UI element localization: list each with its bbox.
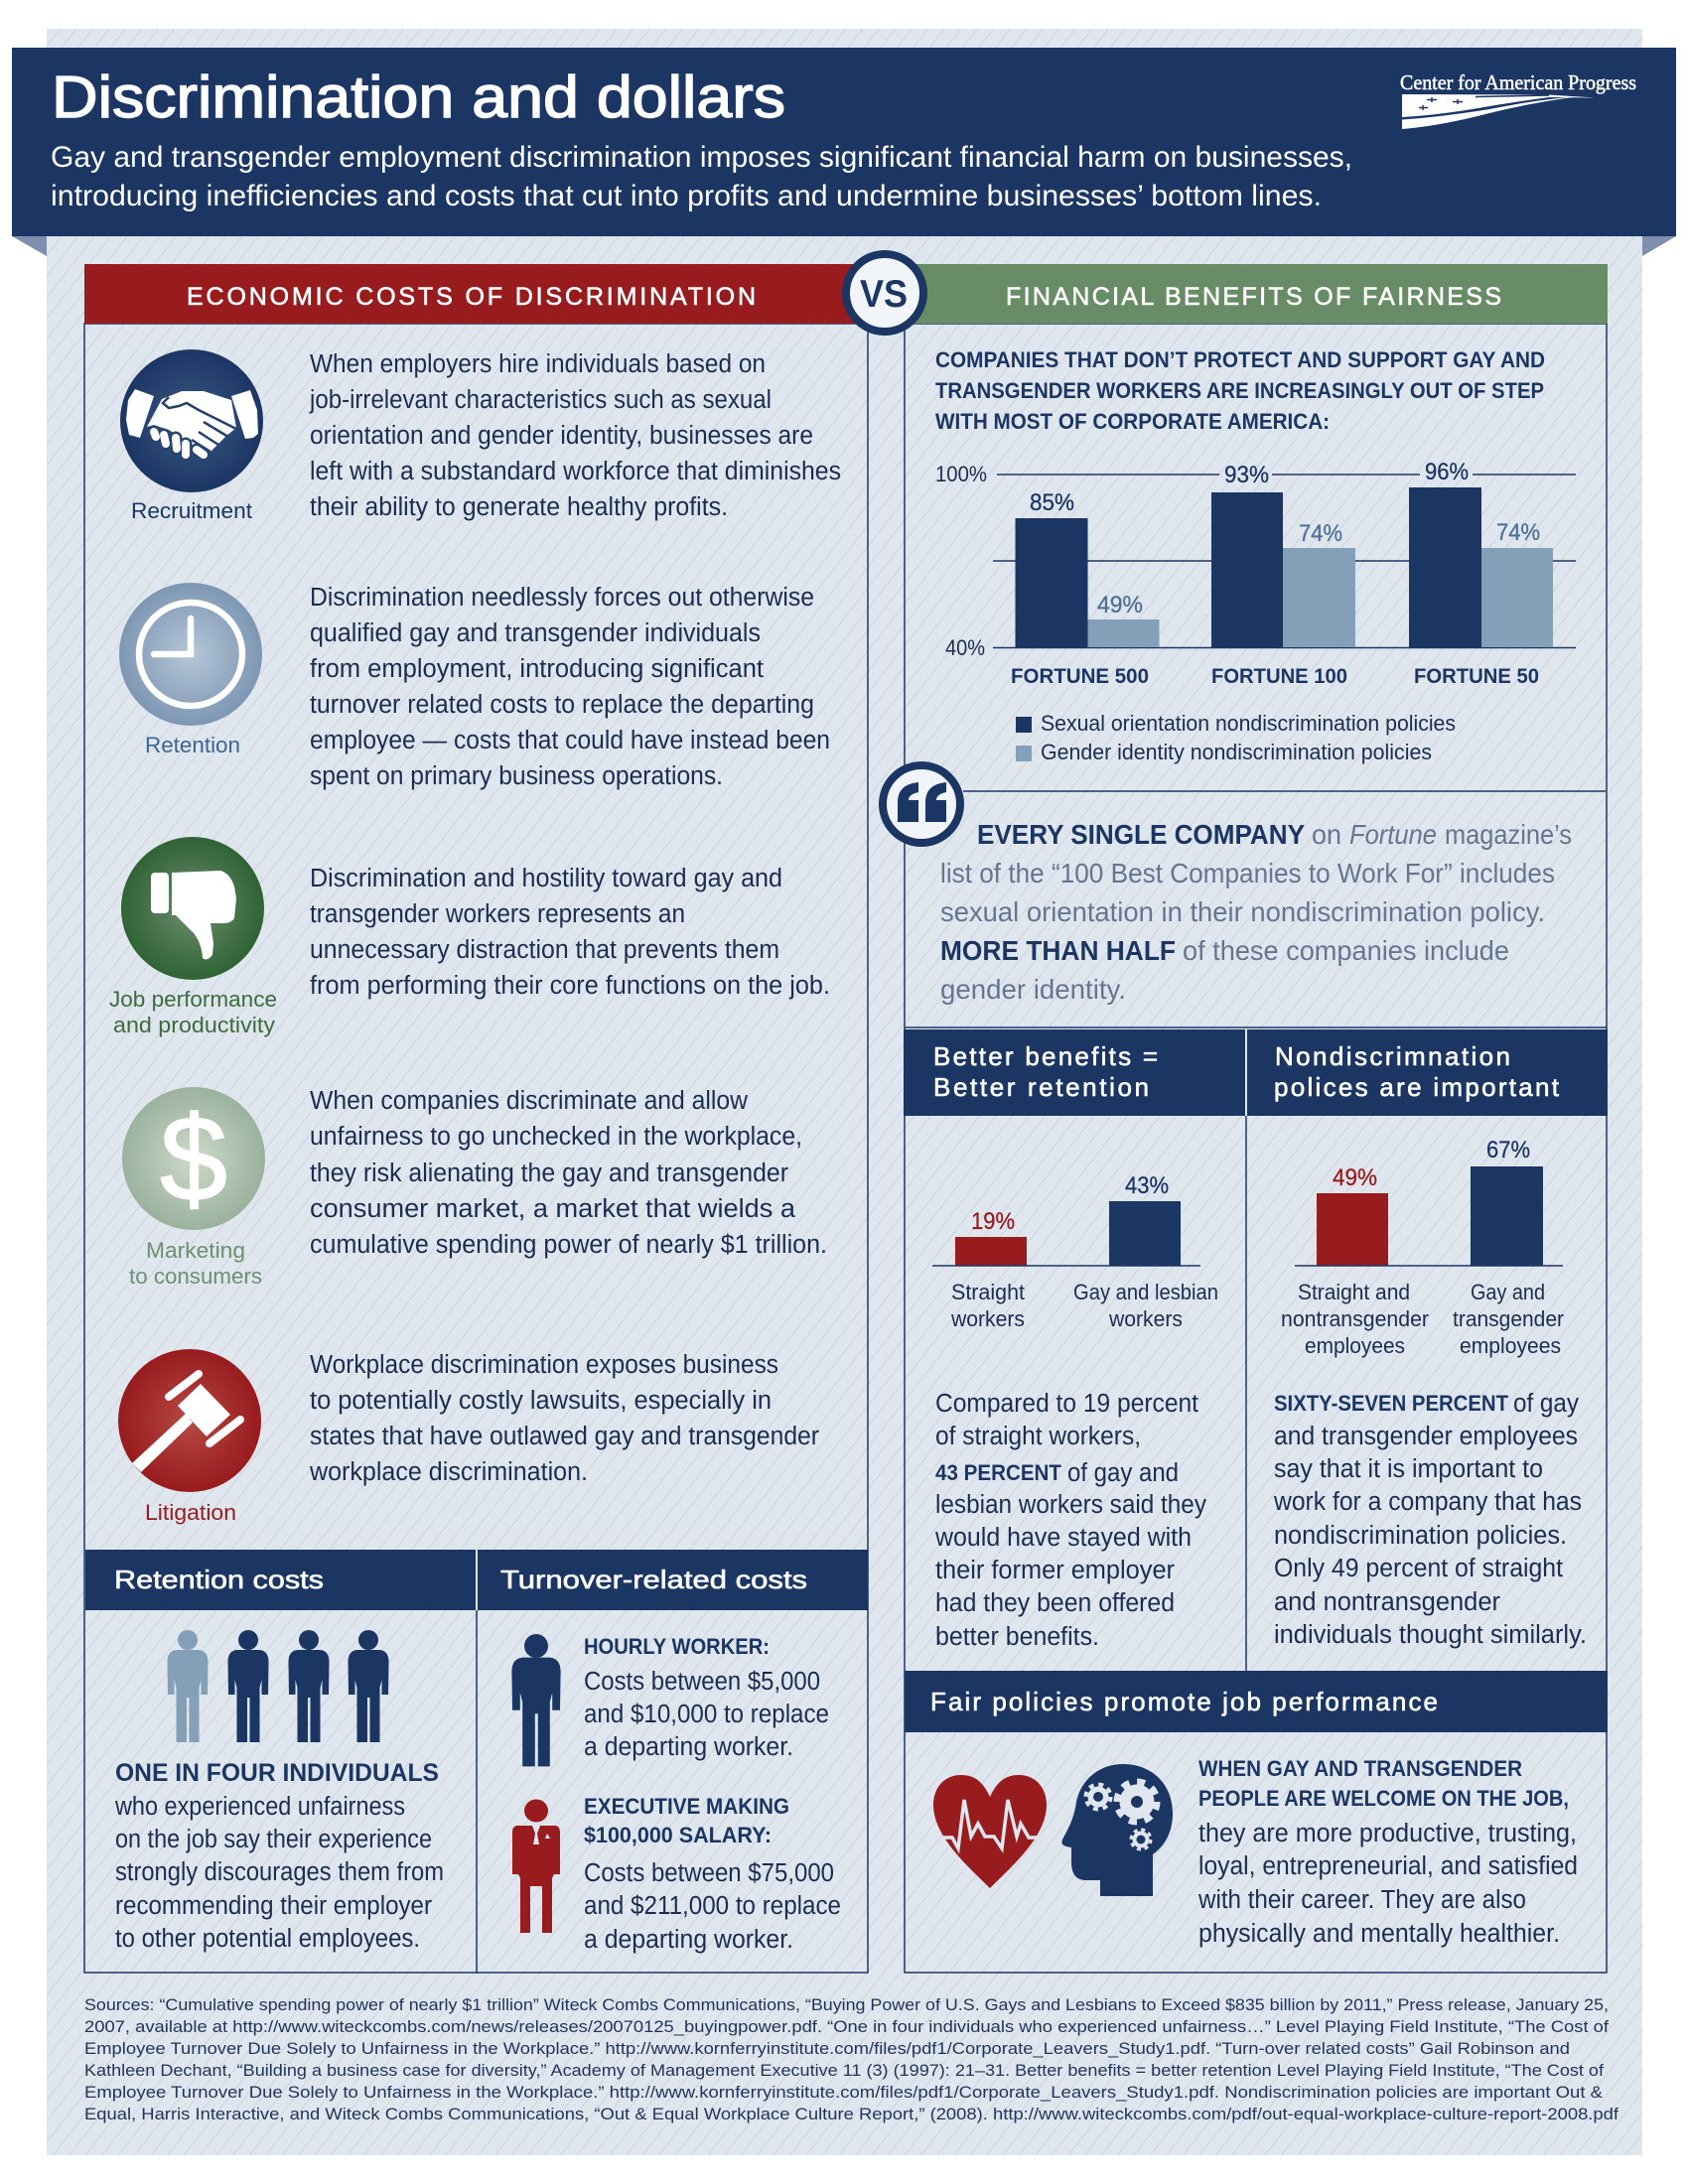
text: recruitment: left with a substandard workforce that diminishes: [310, 458, 841, 485]
bar chart: nondiscrimination policies: 49%: [1333, 1164, 1377, 1191]
callout: every single company: EVERY SINGLE COMPANY: [977, 819, 1305, 850]
icon: hourly worker: [511, 1634, 561, 1766]
bar chart: nondiscrimination policies: employees: [1305, 1333, 1405, 1358]
text: recruitment: When employers hire individuals based on: [310, 350, 766, 378]
text: litigation: [309, 1351, 819, 1486]
label: retention: Retention: [145, 733, 240, 757]
label: job performance and productivity: [109, 987, 277, 1037]
label: marketing to consumers: to consumers: [129, 1264, 262, 1289]
text: nondiscrimination policies: work for a company that has: [1273, 1488, 1582, 1516]
logo: Center for American Progress: Center for American Progress: [1400, 70, 1636, 94]
bar chart: nondiscrimination policies: Gay and: [1471, 1280, 1545, 1304]
text: recruitment: their ability to generate healthy profits.: [310, 493, 728, 521]
subtitle: Gay and transgender employment discrimination imposes significant financial harm on businesses,: [51, 141, 1352, 174]
text: litigation: Workplace discrimination exposes business: [310, 1351, 778, 1379]
text: marketing: consumer market, a market that wields a: [310, 1195, 796, 1223]
text: job performance: transgender workers represents an: [310, 900, 685, 928]
title: Discrimination and dollars: [52, 65, 785, 130]
sources: [84, 1995, 1618, 2123]
text: nondiscrimination policies: SIXTY-SEVEN PERCENT: [1274, 1391, 1509, 1416]
header: fair policies: Fair policies promote job performance: [930, 1687, 1438, 1716]
text: executive: $100,000 SALARY:: [584, 1823, 772, 1847]
text: executive: Costs between $75,000: [584, 1859, 834, 1887]
text: litigation: states that have outlawed gay and transgender: [310, 1423, 819, 1450]
bar chart: nondiscrimination policies: transgender: [1453, 1306, 1564, 1331]
text: better benefits: of straight workers,: [935, 1423, 1141, 1450]
bar chart: fortune companies: 85%: [1030, 489, 1074, 516]
icon: retention clock: [119, 583, 262, 726]
text: marketing: they risk alienating the gay and transgender: [310, 1160, 788, 1187]
legend: Sexual orientation nondiscrimination policies: [1041, 711, 1456, 736]
text: job performance: Discrimination and hostility toward gay and: [310, 865, 782, 892]
icon: recruitment handshake: [120, 349, 263, 492]
bar chart: better benefits: Gay and lesbian: [1073, 1280, 1218, 1304]
bar chart: fortune companies: 74%: [1299, 520, 1342, 547]
text: nondiscrimination policies: of gay: [1513, 1390, 1579, 1418]
text: companies out of step: COMPANIES THAT DON’T PROTECT AND SUPPORT GAY AND: [935, 347, 1545, 372]
bar chart: better benefits: 19%: [971, 1208, 1015, 1235]
text: job performance: from performing their core functions on the job.: [310, 972, 830, 1000]
header: better benefits and nondiscrimination: Nondiscrimnation: [1275, 1041, 1510, 1071]
icon: quotation mark: [883, 765, 960, 843]
text: fair policies: loyal, entrepreneurial, and satisfied: [1198, 1852, 1578, 1880]
header banner: [12, 48, 1676, 236]
text: one in four individuals: [114, 1759, 444, 1953]
icon: marketing dollar sign: [122, 1087, 265, 1230]
icon: versus badge: VS: [860, 273, 908, 316]
header: retention and turnover costs: Turnover-related costs: [500, 1565, 807, 1594]
subtitle: [51, 141, 1352, 212]
ribbon fold right: [1642, 236, 1676, 256]
legend: Gender identity nondiscrimination policies: [1041, 740, 1432, 764]
sources: Equal, Harris Interactive, and Witeck Combs Communications, “Out & Equal Workplace Culture Report,” (2008). http://www.witeckcombs.com/pdf/out-equal-workplace-culture-report-2008.pdf: [84, 2105, 1618, 2123]
text: one in four individuals: to other potential employees.: [115, 1925, 420, 1953]
label: marketing to consumers: [129, 1238, 262, 1289]
text: recruitment: job-irrelevant characteristics such as sexual: [309, 386, 772, 414]
text: fair policies: they are more productive, trusting,: [1198, 1820, 1577, 1847]
text: better benefits: [934, 1390, 1206, 1651]
bar chart: fortune companies: 74%: [1496, 519, 1540, 546]
callout: every single company: Fortune: [1349, 819, 1437, 850]
sources: 2007, available at http://www.witeckcombs.com/news/releases/20070125_buyingpower.pdf. “One in four individuals who experienced unfairness…” Level Playing Field Institute, “The Cost of: [84, 2017, 1609, 2036]
callout: every single company: magazine’s: [1445, 819, 1572, 850]
text: nondiscrimination policies: nondiscrimination policies.: [1274, 1522, 1567, 1550]
text: nondiscrimination policies: say that it is important to: [1274, 1455, 1543, 1483]
bar chart: better benefits: workers: [950, 1306, 1025, 1331]
bar chart: fortune companies: FORTUNE 100: [1211, 665, 1347, 688]
text: retention: Discrimination needlessly forces out otherwise: [310, 584, 814, 612]
bar chart: better benefits: workers: [1108, 1306, 1183, 1331]
text: fair policies: PEOPLE ARE WELCOME ON THE JOB,: [1198, 1786, 1569, 1811]
sources: Employee Turnover Due Solely to Unfairness in the Workplace.” http://www.kornferryinstitute.com/files/pdf1/Corporate_Leavers_Study1.pdf. “Turn-over related costs” Gail Robinson and: [84, 2039, 1570, 2058]
text: nondiscrimination policies: individuals thought similarly.: [1274, 1621, 1587, 1649]
callout: every single company: MORE THAN HALF: [940, 935, 1176, 966]
header: fair policies: [905, 1671, 1608, 1732]
sources: Kathleen Dechant, “Building a business case for diversity,” Academy of Management Executive 11 (3) (1997): 21–31. Better benefits = better retention Level Playing Field Institute, “The Cost of: [84, 2061, 1604, 2080]
heading: financial benefits: [894, 264, 1608, 324]
bar chart: fortune companies: 93%: [1224, 462, 1269, 488]
callout: every single company: sexual orientation in their nondiscrimination policy.: [940, 896, 1545, 927]
bar chart: fortune companies: [935, 459, 1576, 688]
text: litigation: to potentially costly lawsuits, especially in: [310, 1387, 772, 1415]
text: one in four individuals: who experienced unfairness: [114, 1793, 405, 1821]
bar chart: better benefits: [932, 1172, 1218, 1331]
text: fair policies: with their career. They are also: [1197, 1886, 1526, 1914]
text: marketing: unfairness to go unchecked in the workplace,: [310, 1123, 802, 1151]
text: nondiscrimination policies: Only 49 percent of straight: [1274, 1555, 1563, 1582]
header: better benefits and nondiscrimination: [904, 1029, 1608, 1116]
text: fair policies: [1197, 1756, 1578, 1948]
text: retention: turnover related costs to replace the departing: [310, 691, 814, 719]
bar chart: fortune companies: 96%: [1425, 459, 1469, 485]
bar chart: better benefits: 43%: [1125, 1172, 1169, 1199]
text: better benefits: of gay and: [1067, 1459, 1179, 1487]
text: hourly worker: a departing worker.: [584, 1733, 793, 1761]
text: hourly worker: Costs between $5,000: [584, 1668, 820, 1696]
text: marketing: [310, 1087, 827, 1259]
header: retention and turnover costs: [85, 1550, 868, 1610]
text: companies out of step: TRANSGENDER WORKERS ARE INCREASINGLY OUT OF STEP: [935, 378, 1544, 403]
sources: Employee Turnover Due Solely to Unfairness in the Workplace.” http://www.kornferryinstitute.com/files/pdf1/Corporate_Leavers_Study1.pdf. Nondiscrimination policies are important Out &: [84, 2083, 1604, 2102]
callout: every single company: on: [1312, 819, 1341, 850]
text: retention: [310, 584, 830, 790]
label: marketing to consumers: Marketing: [146, 1238, 245, 1263]
icon: job performance thumbs down: [121, 837, 264, 980]
bar chart: nondiscrimination policies: nontransgender: [1281, 1306, 1429, 1331]
callout: every single company: [940, 819, 1572, 1005]
text: better benefits: would have stayed with: [934, 1524, 1192, 1552]
bar chart: better benefits: Straight: [951, 1280, 1025, 1304]
text: companies out of step: [935, 347, 1545, 434]
text: better benefits: better benefits.: [935, 1623, 1099, 1651]
text: job performance: unnecessary distraction that prevents them: [310, 936, 779, 964]
text: executive: a departing worker.: [584, 1926, 793, 1954]
icon: heart with pulse: [933, 1775, 1047, 1888]
text: hourly worker: and $10,000 to replace: [584, 1701, 829, 1728]
text: fair policies: physically and mentally healthier.: [1198, 1920, 1560, 1948]
text: executive: and $211,000 to replace: [584, 1892, 841, 1920]
text: hourly worker: HOURLY WORKER:: [584, 1634, 770, 1659]
header: better benefits and nondiscrimination: polices are important: [1274, 1072, 1560, 1102]
text: one in four individuals: recommending their employer: [115, 1892, 432, 1920]
bar chart: nondiscrimination policies: employees: [1460, 1333, 1561, 1358]
text: better benefits: 43 PERCENT: [935, 1460, 1062, 1485]
bar chart: fortune companies: 100%: [935, 462, 987, 486]
text: hourly worker: [584, 1634, 829, 1761]
icon: marketing dollar sign: $: [160, 1091, 227, 1226]
text: retention: from employment, introducing significant: [310, 655, 764, 683]
callout: every single company: gender identity.: [940, 974, 1126, 1005]
text: executive: EXECUTIVE MAKING: [584, 1794, 789, 1819]
bar chart: nondiscrimination policies: [1281, 1137, 1564, 1358]
legend: [1016, 711, 1456, 764]
bar chart: nondiscrimination policies: Straight and: [1298, 1280, 1410, 1304]
text: companies out of step: WITH MOST OF CORPORATE AMERICA:: [935, 409, 1330, 434]
heading: economic costs: ECONOMIC COSTS OF DISCRIMINATION: [187, 283, 756, 311]
text: executive: [584, 1794, 841, 1954]
heading: financial benefits: FINANCIAL BENEFITS OF FAIRNESS: [1006, 283, 1501, 311]
header: better benefits and nondiscrimination: Better benefits =: [933, 1041, 1158, 1071]
icon: versus badge: [846, 254, 923, 332]
panel: economic costs of discrimination: [84, 264, 879, 1974]
text: marketing: When companies discriminate and allow: [310, 1087, 749, 1115]
text: recruitment: orientation and gender identity, businesses are: [310, 422, 813, 450]
text: better benefits: lesbian workers said they: [935, 1491, 1206, 1519]
text: recruitment: [309, 350, 841, 521]
text: better benefits: had they been offered: [935, 1589, 1175, 1617]
text: litigation: workplace discrimination.: [309, 1458, 588, 1486]
text: job performance: [310, 865, 830, 1000]
bar chart: nondiscrimination policies: 67%: [1486, 1137, 1530, 1163]
header: retention and turnover costs: Retention costs: [114, 1565, 324, 1594]
logo: Center for American Progress: [1400, 70, 1636, 129]
label: recruitment: Recruitment: [131, 498, 252, 523]
text: better benefits: their former employer: [935, 1557, 1176, 1584]
label: litigation: Litigation: [145, 1500, 236, 1525]
subtitle: introducing inefficiencies and costs that cut into profits and undermine businesses’ bottom lines.: [51, 180, 1322, 212]
bar chart: fortune companies: 49%: [1097, 592, 1143, 618]
callout: every single company: of these companies include: [1183, 935, 1509, 966]
icon: head with gears: [1061, 1764, 1173, 1896]
text: retention: employee — costs that could have instead been: [310, 727, 830, 754]
text: nondiscrimination policies: [1273, 1390, 1587, 1649]
sources: Sources: “Cumulative spending power of nearly $1 trillion” Witeck Combs Communications, “Buying Power of U.S. Gays and Lesbians to Exceed $835 billion by 2011,” Press release, January 25,: [84, 1995, 1609, 2014]
text: nondiscrimination policies: and nontransgender: [1274, 1588, 1500, 1616]
icon: executive: [512, 1799, 560, 1933]
text: better benefits: Compared to 19 percent: [935, 1390, 1198, 1418]
text: one in four individuals: strongly discourages them from: [115, 1858, 444, 1886]
text: one in four individuals: on the job say their experience: [115, 1826, 432, 1853]
header: better benefits and nondiscrimination: Better retention: [933, 1072, 1149, 1102]
icon: litigation gavel: [118, 1349, 261, 1492]
bar chart: fortune companies: FORTUNE 500: [1011, 665, 1149, 688]
text: fair policies: WHEN GAY AND TRANSGENDER: [1198, 1756, 1522, 1781]
text: retention: qualified gay and transgender individuals: [310, 619, 761, 647]
bar chart: fortune companies: FORTUNE 50: [1414, 665, 1539, 688]
label: job performance and productivity: and productivity: [113, 1013, 275, 1037]
panel: financial benefits of fairness: [883, 264, 1608, 1973]
label: job performance and productivity: Job performance: [109, 987, 277, 1012]
text: marketing: cumulative spending power of nearly $1 trillion.: [310, 1231, 827, 1259]
ribbon fold left: [12, 236, 47, 256]
icon: one in four people: [167, 1630, 389, 1742]
callout: every single company: list of the “100 Best Companies to Work For” includes: [940, 858, 1555, 888]
text: nondiscrimination policies: and transgender employees: [1274, 1423, 1578, 1450]
text: retention: spent on primary business operations.: [310, 762, 723, 790]
bar chart: fortune companies: 40%: [945, 635, 985, 660]
heading: economic costs: [84, 264, 879, 324]
text: one in four individuals: ONE IN FOUR INDIVIDUALS: [115, 1759, 439, 1787]
